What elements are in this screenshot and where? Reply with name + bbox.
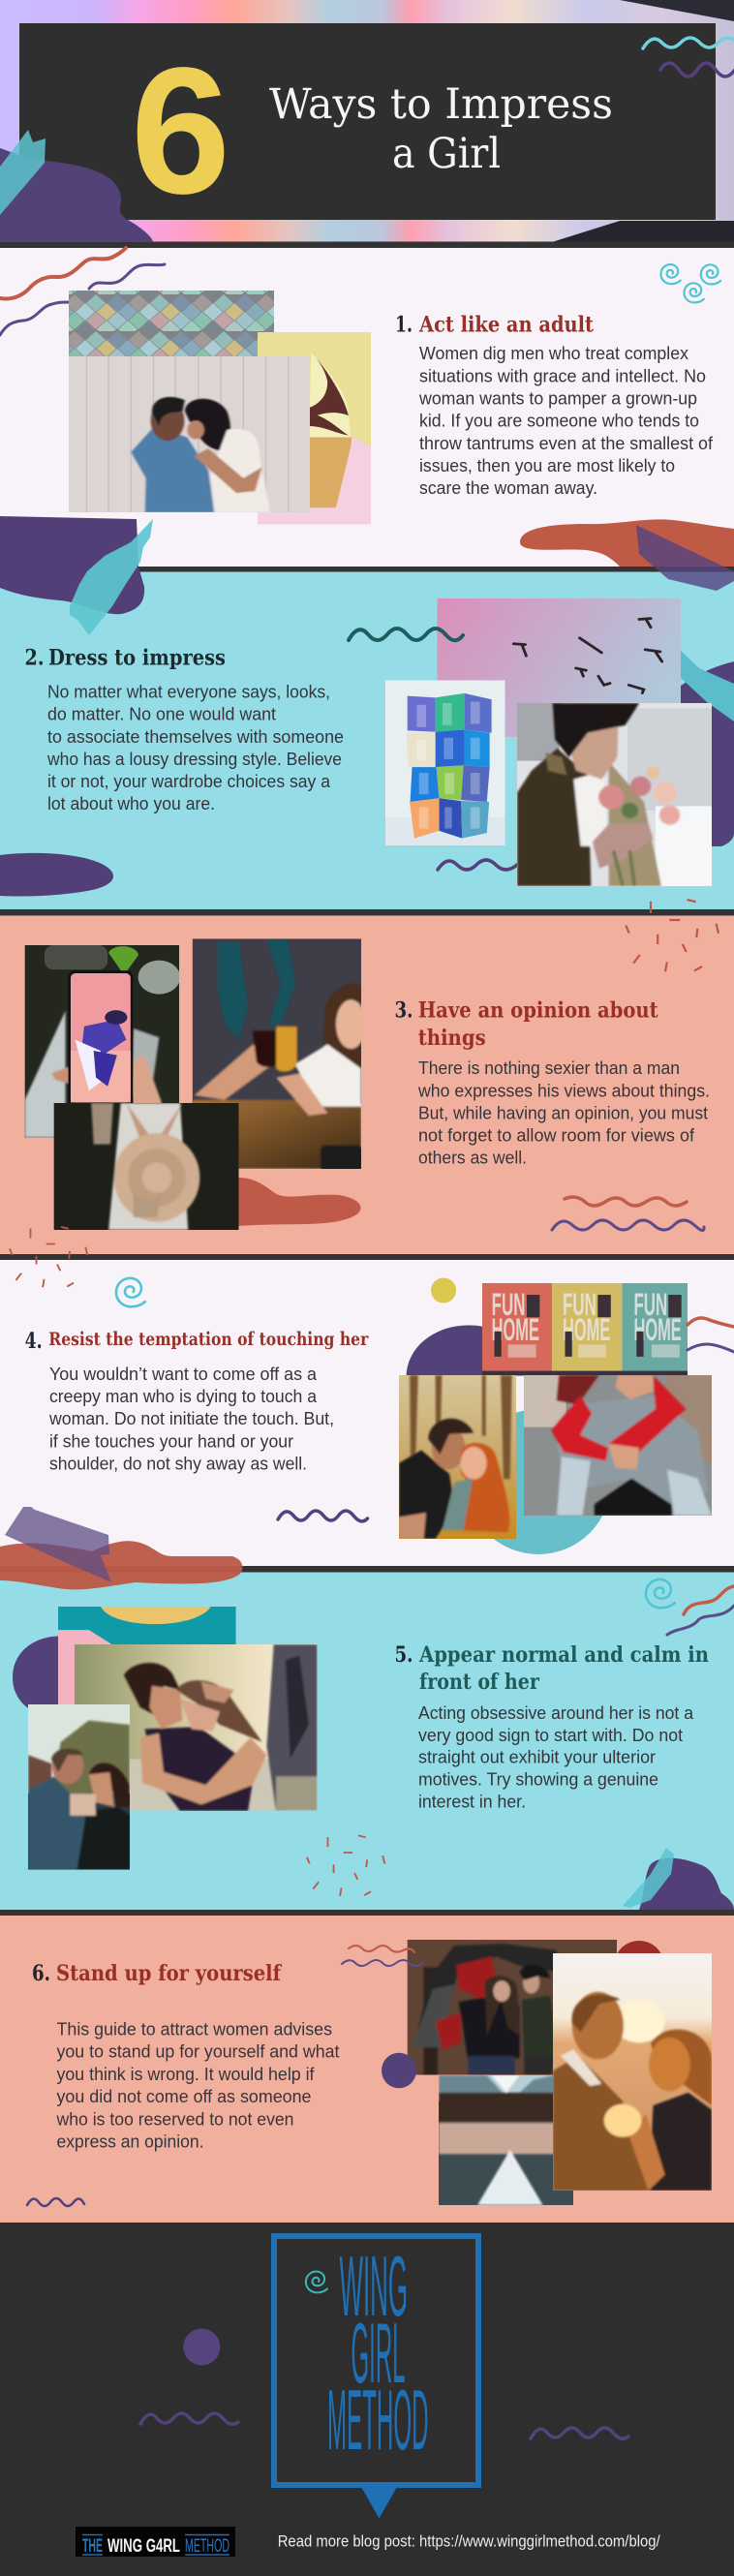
blob: section 2 bottom left [0, 853, 113, 896]
title text: a Girl [392, 130, 501, 178]
body text 4: woman. Do not initiate the touch. But, [48, 1409, 334, 1428]
body text 5: very good sign to start with. Do not [418, 1726, 683, 1745]
body text 5: interest in her. [418, 1792, 526, 1811]
waves: section 4 right [688, 1318, 734, 1352]
panel: footer [0, 2223, 734, 2576]
small logo: WING G4RL [107, 2536, 180, 2557]
heading 5 [395, 1642, 709, 1695]
panel: section 3 background [0, 916, 734, 1255]
panel: section 6 background [0, 1916, 734, 2223]
body text 2: it or not, your wardrobe choices say a [47, 772, 331, 791]
heading 3: things [418, 1026, 486, 1051]
logo text [327, 2238, 428, 2468]
circle: purple section 6 [382, 2053, 416, 2088]
heading 5: front of her [419, 1670, 539, 1695]
body text 6: This guide to attract women advises [56, 2020, 332, 2039]
body text 1: issues, then you are most likely to [419, 456, 675, 475]
body text 1: throw tantrums even at the smallest of [419, 434, 714, 453]
circle: dark red [614, 1941, 664, 1991]
title text: Ways to Impress [269, 80, 613, 129]
photo: hat and white dress [54, 1103, 238, 1230]
body text 3: who expresses his views about things. [417, 1081, 710, 1100]
heading 6: Stand up for yourself [56, 1961, 282, 1986]
photo: ice cream [258, 332, 371, 525]
photo: colourful gift boxes [385, 680, 505, 845]
photo: piggyback [524, 1375, 712, 1516]
wave: section 4 [278, 1511, 368, 1521]
wave: teal dark [349, 629, 463, 640]
body text 5: straight out exhibit your ulterior [418, 1747, 656, 1766]
heading 1: 1. [395, 312, 413, 337]
circle: yellow [431, 1278, 456, 1303]
heading 4 [25, 1329, 369, 1354]
blob and brush: header left [0, 130, 153, 242]
icons: three spirals [660, 264, 720, 302]
body text 2: lot about who you are. [47, 794, 215, 813]
body text 2 [46, 682, 344, 813]
panel: section 2 background [0, 571, 734, 909]
body text 2: do matter. No one would want [47, 705, 276, 724]
waves: section 6 [27, 1946, 423, 2206]
photo: phone in hand [25, 945, 180, 1138]
body text 2: No matter what everyone says, looks, [47, 682, 330, 701]
waves: section 3 [552, 1197, 704, 1231]
body text 3: There is nothing sexier than a man [418, 1058, 680, 1078]
blob and brush: section 1 bottom left [0, 516, 153, 635]
body text 6: who is too reserved to not even [56, 2109, 293, 2129]
small logo [76, 2527, 235, 2557]
heading 3: Have an opinion about [418, 998, 658, 1024]
photo: Fun Home posters: FUN [492, 1288, 525, 1323]
photo: couple on bench [407, 1940, 617, 2075]
body text 3: But, while having an opinion, you must [418, 1103, 708, 1122]
waves: footer [140, 2413, 628, 2438]
panel: section 1 background [0, 248, 734, 567]
dashes: section 3 to 4 boundary [10, 1227, 87, 1287]
small logo: METHOD [185, 2536, 229, 2557]
photo: diamond tiles [69, 291, 274, 358]
blob and brush: section 5 bottom right [623, 1848, 734, 1910]
body text 5: motives. Try showing a genuine [418, 1770, 658, 1790]
big number 6: 6 [131, 31, 230, 231]
icon: spiral [306, 2272, 327, 2292]
photo: Fun Home posters [482, 1283, 688, 1375]
wave: purple [438, 860, 517, 870]
body text 4: if she touches your hand or your [49, 1431, 293, 1451]
divider bars [0, 567, 734, 1916]
photo: couple against wall [69, 356, 310, 512]
body text 3 [417, 1058, 710, 1168]
heading 2: Dress to impress [48, 645, 226, 670]
photo: man smelling flowers [517, 703, 712, 886]
heading 3: 3. [395, 998, 413, 1024]
logo frame: GIRL [351, 2305, 405, 2401]
title box [19, 23, 716, 231]
body text 2: to associate themselves with someone [47, 727, 344, 747]
panel: footer: METHOD [327, 2372, 428, 2468]
body text 4: You wouldn’t want to come off as a [49, 1365, 318, 1384]
icon: spiral section 4 [116, 1278, 145, 1306]
section 5 waves and spiral [646, 1579, 734, 1635]
heading 1: Act like an adult [418, 312, 595, 337]
section 1 decoration [0, 248, 165, 335]
circle: teal [466, 1409, 611, 1554]
blob: section 1 bottom right [520, 519, 734, 591]
dashes: section 5 [307, 1835, 384, 1896]
photo: couple at sunset [553, 1953, 712, 2191]
title text [269, 80, 613, 178]
frame pointer [361, 2487, 397, 2518]
blob: section 3 red [238, 1178, 361, 1226]
blob and brush: section 4 bottom left [0, 1507, 242, 1589]
body text 4: shoulder, do not shy away as well. [49, 1455, 307, 1474]
body text 6: you did not come off as someone [56, 2087, 312, 2106]
photo: couple in forest [399, 1375, 516, 1539]
waves: header right [643, 38, 734, 77]
dashes: section 3 top right [626, 900, 719, 971]
logo frame: WING [339, 2238, 408, 2334]
heading 4: 4. [25, 1329, 43, 1354]
panel: section 4 background [0, 1260, 734, 1566]
body text 6 [56, 2020, 340, 2152]
body text 5 [418, 1703, 694, 1811]
heading 6: 6. [32, 1961, 50, 1986]
photo: Fun Home posters: HOME [563, 1313, 610, 1348]
section 2 right decoration [681, 651, 734, 846]
body text 3: others as well. [418, 1149, 527, 1168]
body text 3: not forget to allow room for views of [418, 1125, 695, 1145]
body text 1: scare the woman away. [419, 478, 597, 498]
photo: painted wall [58, 1607, 236, 1704]
body text 1 [418, 344, 714, 498]
body text 1: situations with grace and intellect. No [419, 366, 706, 385]
logo frame [274, 2236, 478, 2518]
body text 1: woman wants to pamper a grown-up [418, 389, 697, 409]
body text 1: Women dig men who treat complex [419, 344, 688, 363]
panel: header background [0, 0, 734, 248]
heading 4: Resist the temptation of touching her [48, 1329, 369, 1350]
body text 4: creepy man who is dying to touch a [49, 1387, 318, 1406]
body text 1: kid. If you are someone who tends to [419, 411, 699, 430]
body text 6: express an opinion. [56, 2132, 203, 2152]
photo: toasting at a bar [192, 938, 361, 1169]
circle: purple footer [183, 2328, 220, 2365]
body text 6: you think is wrong. It would help if [56, 2065, 315, 2084]
half circle: purple section 5 [13, 1637, 60, 1719]
heading 3 [395, 998, 658, 1051]
half circle: purple [407, 1325, 489, 1377]
body text 5: Acting obsessive around her is not a [418, 1703, 694, 1723]
body text 4 [48, 1365, 334, 1474]
photo collage: couple, tiles, ice cream [69, 291, 371, 525]
photo: couple embracing [75, 1644, 318, 1811]
photo: mountain lake [439, 2075, 573, 2205]
panel: section 5 background [0, 1573, 734, 1910]
photo: Fun Home posters: FUN [563, 1288, 596, 1323]
heading 5: 5. [395, 1642, 413, 1668]
blog link text: Read more blog post: https://www.winggirlmethod.com/blog/ [278, 2531, 660, 2551]
body text 2: who has a lousy dressing style. Believe [46, 750, 342, 769]
photo: Fun Home posters: HOME [492, 1313, 539, 1348]
photo: couple with wine [28, 1704, 130, 1870]
heading 2: 2. [25, 645, 45, 670]
photo: birds in sky [438, 598, 681, 737]
small logo: THE [82, 2536, 103, 2557]
body text 6: you to stand up for yourself and what [56, 2042, 339, 2062]
